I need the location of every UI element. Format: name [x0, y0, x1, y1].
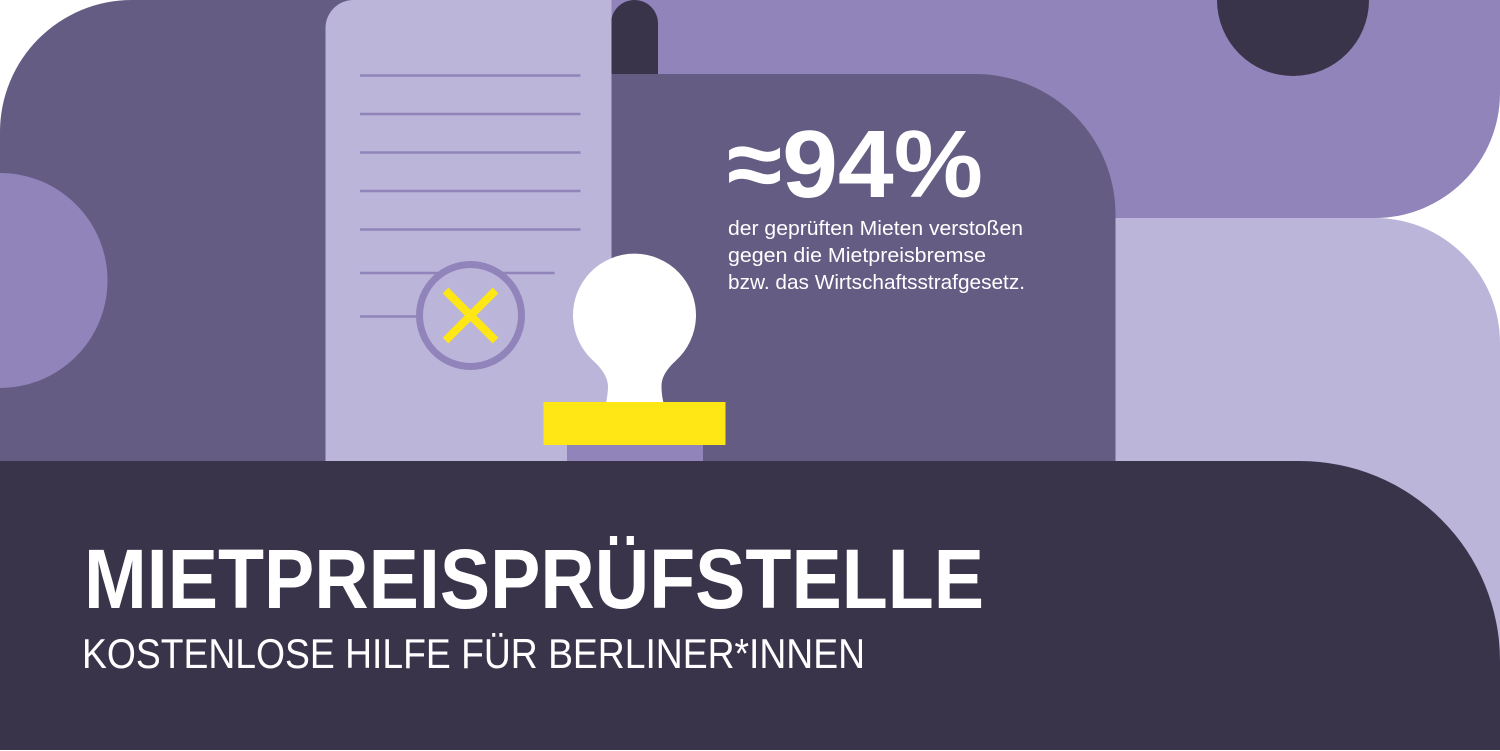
panel: document	[326, 0, 612, 470]
description line 3: bzw. das Wirtschaftsstrafgesetz.	[728, 271, 1025, 294]
icon: dark tab behind document	[611, 0, 658, 75]
stamp yellow plate	[544, 402, 726, 445]
title: MIETPREISPRÜFSTELLE	[84, 532, 984, 626]
panel: statistic background	[611, 74, 1116, 470]
icon: rejected seal with yellow cross	[420, 264, 522, 366]
icon: dark half circle top right	[1217, 0, 1369, 76]
stamp handle	[573, 254, 696, 403]
panel: left dark purple shape	[0, 0, 380, 470]
stamp base	[567, 440, 703, 470]
icon: stamp	[544, 254, 726, 470]
panel: top right purple shape	[600, 0, 1500, 218]
panel: bottom title band	[0, 461, 1500, 750]
statistic description	[728, 217, 1025, 294]
description line 1: der geprüften Mieten verstoßen	[728, 217, 1023, 240]
icon: left purple half circle	[0, 173, 108, 388]
panel: right light shape	[1100, 218, 1500, 700]
document text lines	[360, 76, 580, 316]
statistic: percentage: ≈94%	[727, 111, 983, 218]
subtitle: KOSTENLOSE HILFE FÜR BERLINER*INNEN	[82, 630, 865, 677]
description line 2: gegen die Mietpreisbremse	[728, 244, 986, 267]
